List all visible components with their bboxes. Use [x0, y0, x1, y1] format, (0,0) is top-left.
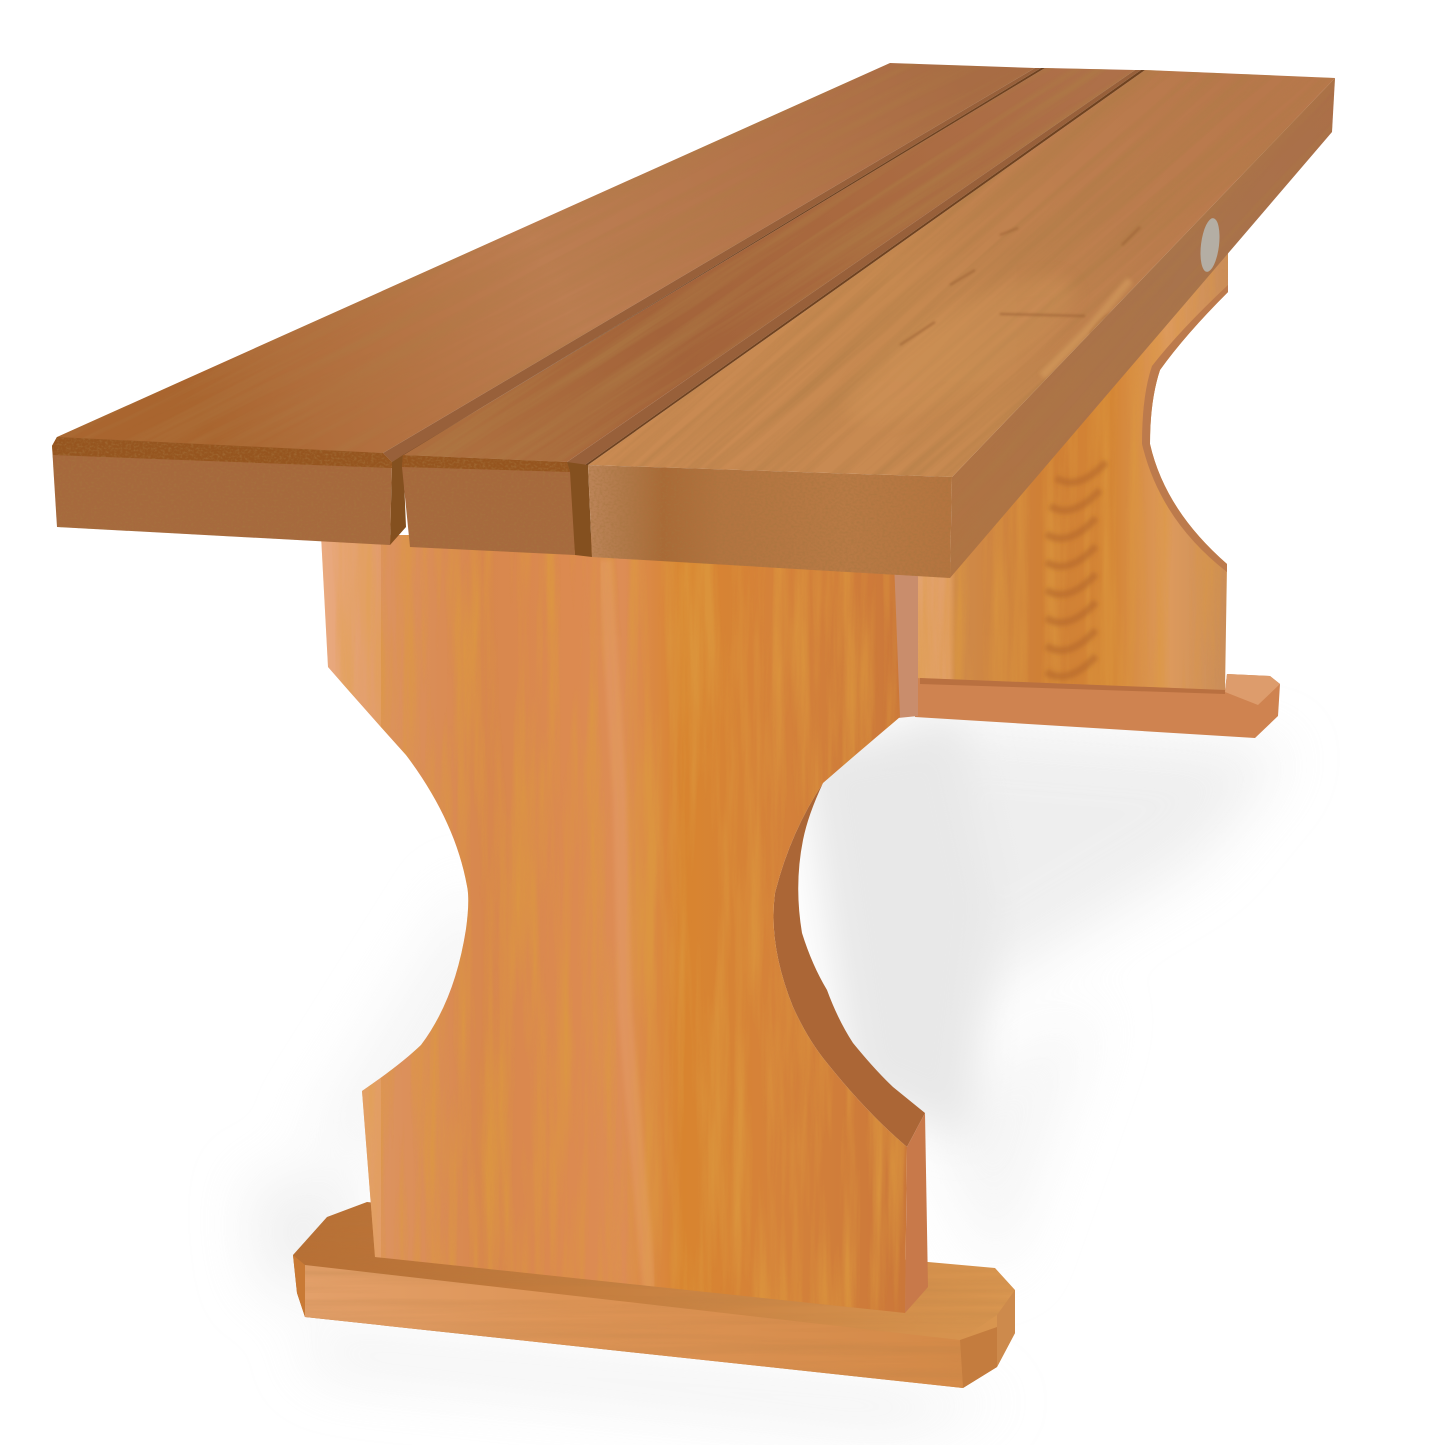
ground shadows [250, 720, 1290, 1430]
end face dark bands [52, 437, 570, 472]
foot far end [997, 1290, 1015, 1367]
plank grooves [383, 68, 1145, 557]
seat plank right [588, 70, 1335, 477]
back foot [915, 674, 1280, 738]
back leg [918, 254, 1228, 690]
seat plank left [52, 63, 1035, 453]
front foot [290, 1200, 1030, 1390]
end face right [588, 465, 952, 578]
front foot front edge [305, 1265, 963, 1388]
front leg notch cut surface [773, 783, 925, 1147]
end face middle [402, 455, 575, 555]
plank end faces [52, 437, 952, 578]
foot right chamfer [960, 1327, 997, 1388]
front leg [310, 530, 930, 1330]
seat side face [950, 78, 1335, 578]
notch background shadow [800, 720, 1000, 1140]
front leg side strip [888, 568, 918, 718]
knot and cathedral grain [900, 227, 1140, 345]
back leg cut edge [1142, 285, 1228, 572]
seat plank middle [404, 68, 1135, 462]
end face left [52, 437, 392, 545]
steel bolt [1198, 217, 1222, 273]
foot left chamfer [293, 1255, 305, 1317]
right side strip lower [905, 1113, 928, 1313]
